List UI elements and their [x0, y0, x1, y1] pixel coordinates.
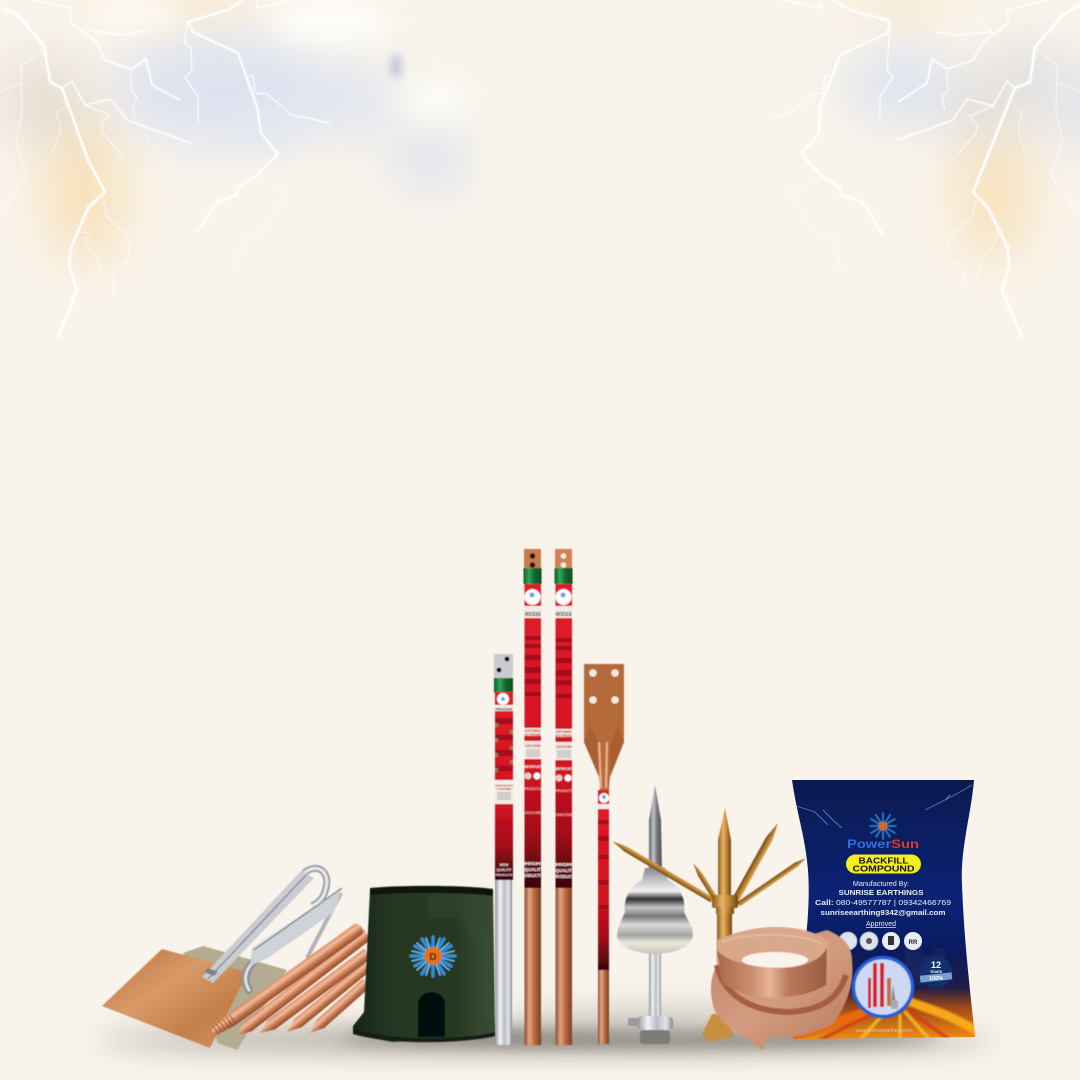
approval seals: RR — [909, 940, 918, 946]
manufacturer details: sunriseearthing9342@gmail.com — [820, 908, 946, 917]
copper bonded electrode rod 2: HIGH — [556, 862, 572, 867]
copper bonded electrode rod 2: ROCES — [556, 612, 572, 618]
storm clouds and glow, left — [0, 0, 469, 265]
copper bonded electrode rod 1: UFACTURE — [525, 811, 541, 815]
product circle — [854, 958, 912, 1016]
copper bonded electrode rod 2: ERTIFICAT — [556, 767, 572, 771]
copper earthing plate — [102, 949, 248, 1048]
grey earthing plate — [183, 946, 287, 1050]
copper bonded electrode rod 2: UFACTUR — [556, 813, 572, 817]
copper bonded electrode rod 1: ERTIFICAT — [525, 765, 541, 769]
copper bonded electrode rod 2: PRODUCT — [556, 789, 572, 793]
yellow product badge: COMPOUND — [852, 864, 914, 874]
warranty badge: 12 — [931, 960, 941, 970]
green inspection pit — [353, 886, 496, 1042]
copper strip coil — [711, 927, 852, 1050]
copper bonded electrode rod 2: CAUTION — [556, 745, 572, 749]
galvanised electrode rod: HIGH — [500, 863, 509, 867]
warranty badge: 100% — [929, 976, 943, 982]
lightning, left — [0, 0, 330, 338]
copper bonded electrode rod 1: HIGH — [525, 861, 541, 866]
city and road light trails — [793, 1000, 975, 1040]
warranty badge: YEARS — [930, 970, 943, 974]
galvanised electrode rod: CAUTION — [497, 787, 511, 791]
brand name: Power Sun — [847, 839, 919, 851]
lightning, right — [770, 0, 1080, 338]
flat copper earth tape electrode — [584, 664, 624, 1044]
yellow product badge — [846, 854, 921, 874]
approval seals — [839, 932, 922, 950]
gold multi-spike air terminal — [611, 808, 807, 1042]
copper bonded electrode rod 1: PRODUCTS — [525, 787, 541, 791]
galvanised electrode rod: PROCESS — [496, 706, 513, 712]
copper bonded electrode rod 1: ECTRODE — [525, 733, 541, 737]
copper bonded electrode rod 1: QUALIT — [525, 867, 541, 872]
manufacturer details: Manufactured By: — [853, 879, 909, 888]
manufacturer details: Approved — [866, 921, 896, 928]
copper bonded electrode rod 2: ECTROD — [556, 734, 572, 738]
icon: sun logo on pit — [411, 937, 455, 976]
icon: bag sun logo — [870, 813, 896, 839]
warranty badge — [920, 956, 952, 988]
copper bonded electrode rod 2: QUALIT — [556, 868, 572, 873]
copper bonded electrode rod 1: ODUCT — [525, 873, 541, 878]
storm clouds and glow, right — [840, 0, 1080, 265]
icon: sun logo on pit: D — [429, 952, 437, 963]
copper bonded electrode rod 2 — [554, 549, 572, 1045]
copper bonded electrode rod 2: RODUC — [556, 874, 572, 879]
copper bonded electrode rod 1: CAUTION — [525, 744, 541, 748]
backfill compound bag — [792, 780, 975, 1040]
manufacturer details — [815, 879, 951, 928]
copper ground rods bundle — [209, 922, 371, 1040]
chrome lightning air terminal — [617, 785, 693, 1044]
ground shadow — [95, 1006, 995, 1049]
copper bonded electrode rod 1: ROCESS — [525, 612, 541, 618]
copper bonded electrode rod 1: ARTHING — [525, 729, 541, 733]
manufacturer details: SUNRISE EARTHINGS — [838, 888, 924, 897]
yellow product badge: BACKFILL — [858, 856, 908, 866]
copper bonded electrode rod 1 — [524, 549, 542, 1045]
bag lightning accents — [796, 785, 972, 828]
copper bonded electrode rod 2: ARTHING — [556, 730, 572, 734]
galvanised electrode rod — [494, 654, 513, 1045]
galvanised electrode rod: QUALITY — [497, 868, 512, 872]
silver strap clamp — [202, 868, 342, 990]
manufacturer details: Call: 080-49577787 | 09342466769 — [815, 898, 951, 907]
website: www.sunriseearthing.com — [856, 1028, 912, 1034]
pit door opening — [418, 992, 445, 1037]
galvanised electrode rod: PRODUCTS — [496, 873, 512, 877]
